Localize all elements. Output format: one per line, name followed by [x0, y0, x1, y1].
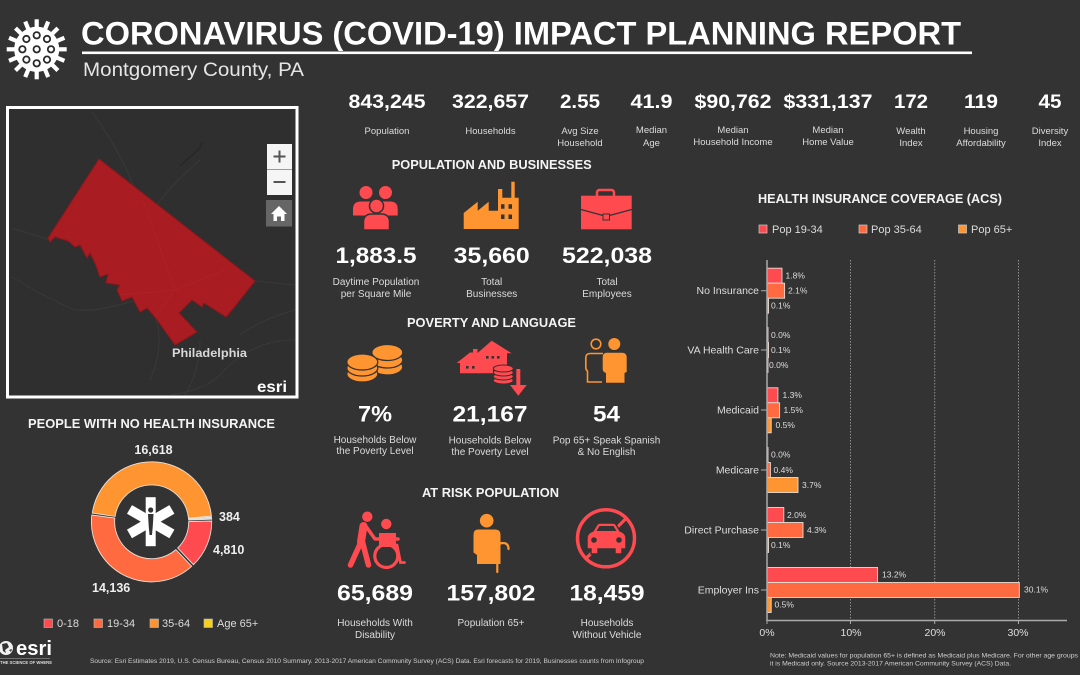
chart legend	[759, 224, 1012, 236]
panel: at risk population: 18,459	[570, 581, 644, 606]
panel: population and businesses: Employees	[582, 289, 632, 300]
heading: AT RISK POPULATION	[422, 485, 559, 500]
panel: top statistics: Index	[899, 138, 923, 149]
value labels: 0.5%	[774, 600, 794, 610]
value labels: 3.7%	[802, 480, 822, 490]
panel: top statistics: Avg Size	[561, 126, 599, 137]
panel: top statistics: Home Value	[802, 137, 854, 148]
value labels: 0.1%	[771, 540, 791, 550]
donut legend: Age 65+	[217, 618, 258, 630]
heading: HEALTH INSURANCE COVERAGE (ACS)	[758, 191, 1002, 206]
home button	[266, 200, 292, 226]
panel: top statistics	[348, 92, 1068, 149]
panel: top statistics: Age	[643, 138, 660, 149]
panel: top statistics: $331,137	[784, 92, 872, 113]
value labels: 30.1%	[1024, 584, 1049, 594]
panel: poverty and language: Households Below	[449, 436, 532, 446]
logo: esri: esri	[16, 638, 52, 660]
donut values: 4,810	[213, 543, 244, 557]
stats: 1,883.5	[336, 243, 416, 268]
axis labels	[759, 627, 1029, 639]
value labels: 0.4%	[774, 465, 793, 475]
axes	[767, 260, 1067, 620]
panel: population and businesses: per Square Mile	[341, 289, 412, 300]
heading: POVERTY AND LANGUAGE	[407, 315, 576, 330]
icon: coins	[347, 344, 403, 382]
value labels: 0.0%	[769, 360, 789, 370]
panel: top statistics: Index	[1038, 138, 1062, 149]
panel: top statistics: Median	[717, 125, 749, 136]
panel: at risk population: Disability	[355, 630, 395, 641]
donut legend: 0-18	[57, 618, 79, 630]
chart legend: Pop 65+	[971, 224, 1012, 236]
map logo: esri	[257, 379, 287, 396]
heading: PEOPLE WITH NO HEALTH INSURANCE	[28, 416, 275, 431]
icon: briefcase	[581, 190, 632, 229]
panel: poverty and language: the Poverty Level	[336, 446, 414, 457]
panel: top statistics: Population	[365, 126, 409, 137]
donut values: 16,618	[134, 443, 173, 457]
category labels: No Insurance	[697, 285, 759, 297]
panel: top statistics: Households	[465, 126, 516, 137]
donut legend	[44, 618, 258, 630]
icon: wheelchair	[350, 512, 404, 568]
value labels: 1.8%	[786, 270, 805, 280]
bar chart	[684, 260, 1067, 639]
panel: map	[8, 108, 297, 397]
value labels: 0.5%	[776, 420, 795, 430]
category labels: Medicaid	[717, 404, 759, 416]
panel: health insurance coverage	[684, 191, 1078, 668]
stats: 65,689	[337, 581, 413, 606]
panel: top statistics: Household Income	[693, 137, 773, 148]
panel: top statistics: 2.55	[560, 92, 600, 113]
panel: top statistics: Household	[557, 138, 603, 149]
panel: top statistics: 41.9	[630, 92, 672, 113]
panel: poverty and language: 54	[593, 402, 621, 427]
panel: top statistics: 45	[1038, 92, 1062, 113]
panel: poverty and language: the Poverty Level	[451, 447, 529, 458]
value labels: 13.2%	[882, 570, 907, 580]
icon: house with falling coins	[457, 341, 527, 396]
panel: population and businesses: Daytime Population	[333, 277, 419, 288]
donut chart	[91, 462, 212, 582]
panel: poverty and language	[334, 315, 660, 458]
panel: top statistics: Housing	[964, 126, 998, 137]
donut legend: 19-34	[107, 618, 135, 630]
panel: top statistics: 843,245	[348, 92, 426, 113]
donut values: 14,136	[92, 581, 130, 595]
category labels: VA Health Care	[687, 344, 759, 356]
chart note	[770, 652, 1078, 668]
category labels: Employer Ins	[698, 584, 759, 596]
value labels: 0.0%	[771, 450, 791, 460]
value labels: 0.1%	[771, 300, 791, 310]
value labels: 1.3%	[782, 390, 802, 400]
logo: esri: THE SCIENCE OF WHERE	[0, 660, 52, 665]
donut values	[92, 443, 244, 595]
axis labels: 30%	[1007, 627, 1029, 639]
panel: population and businesses: Businesses	[466, 289, 517, 300]
logo: esri	[0, 638, 52, 665]
value labels: 4.3%	[807, 525, 827, 535]
title: CORONAVIRUS (COVID-19) IMPACT PLANNING REPORT	[81, 16, 961, 52]
panel: poverty and language: Households Below	[334, 435, 417, 446]
panel: top statistics: $90,762	[694, 92, 772, 113]
bars	[767, 268, 1019, 612]
chart legend: Pop 35-64	[871, 224, 922, 236]
value labels	[769, 270, 1049, 610]
zoom controls	[267, 144, 292, 195]
heading: POPULATION AND BUSINESSES	[392, 157, 592, 172]
value labels: 0.0%	[771, 330, 791, 340]
panel: people with no health insurance	[28, 416, 275, 630]
panel: top statistics: Wealth	[896, 126, 926, 137]
value labels: 0.1%	[771, 345, 791, 355]
panel: population and businesses	[333, 157, 652, 300]
panel: at risk population: 157,802	[446, 581, 536, 606]
value labels: 1.5%	[784, 405, 803, 415]
icon: elder with cane	[474, 514, 508, 572]
panel: at risk population	[337, 485, 644, 641]
panel: top statistics: Affordability	[956, 138, 1006, 149]
source note: Source: Esri Estimates 2019, U.S. Census Bureau, Census 2010 Summary. 2013-2017 American Community Survey (ACS) Data. Esri forecasts for 2019, Businesses counts from Infogroup	[90, 658, 645, 665]
chart note: it is Medicaid only. Source 2013-2017 American Community Survey (ACS) Data.	[770, 660, 1011, 668]
panel: population and businesses: 522,038	[562, 243, 652, 268]
donut values: 384	[219, 510, 240, 524]
panel: top statistics: Median	[812, 125, 844, 136]
icon: star of life	[127, 497, 174, 546]
panel: at risk population: Without Vehicle	[573, 630, 642, 641]
category labels: Medicare	[716, 464, 759, 476]
value labels: 2.1%	[788, 286, 808, 296]
icon: coronavirus	[7, 19, 67, 79]
panel: at risk population: Population 65+	[457, 618, 525, 629]
value labels: 2.0%	[787, 510, 807, 520]
panel: top statistics: 172	[894, 92, 928, 113]
panel: top statistics: Diversity	[1032, 126, 1068, 137]
icon: no vehicle	[578, 510, 634, 567]
icon: two people	[586, 338, 627, 383]
panel: at risk population: Households With	[337, 618, 413, 629]
panel: top statistics: Median	[636, 125, 667, 136]
chart note: Note: Medicaid values for population 65+ is defined as Medicaid plus Medicare. For other age groups	[770, 652, 1078, 660]
panel: population and businesses: 35,660	[454, 243, 530, 268]
panel: poverty and language: Pop 65+ Speak Spanish	[553, 436, 660, 446]
place label: Philadelphia	[172, 346, 247, 360]
axis labels: 10%	[840, 627, 862, 639]
axis labels: 20%	[924, 627, 946, 639]
category labels	[684, 285, 759, 596]
panel: population and businesses: Total	[481, 277, 502, 288]
panel: top statistics: 322,657	[452, 92, 529, 113]
donut legend: 35-64	[162, 618, 190, 630]
icon: people	[353, 186, 398, 230]
stats: 7%	[358, 402, 392, 427]
subtitle: Montgomery County, PA	[83, 60, 304, 81]
panel: top statistics: 119	[964, 92, 998, 113]
chart legend: Pop 19-34	[772, 224, 823, 236]
panel: poverty and language: & No English	[578, 447, 635, 458]
panel: population and businesses: Total	[596, 277, 618, 288]
panel: poverty and language: 21,167	[452, 402, 528, 427]
icon: factory	[464, 182, 519, 229]
panel: at risk population: Households	[581, 618, 633, 629]
category labels: Direct Purchase	[684, 524, 759, 536]
axis labels: 0%	[759, 627, 775, 639]
county shape	[48, 159, 255, 345]
